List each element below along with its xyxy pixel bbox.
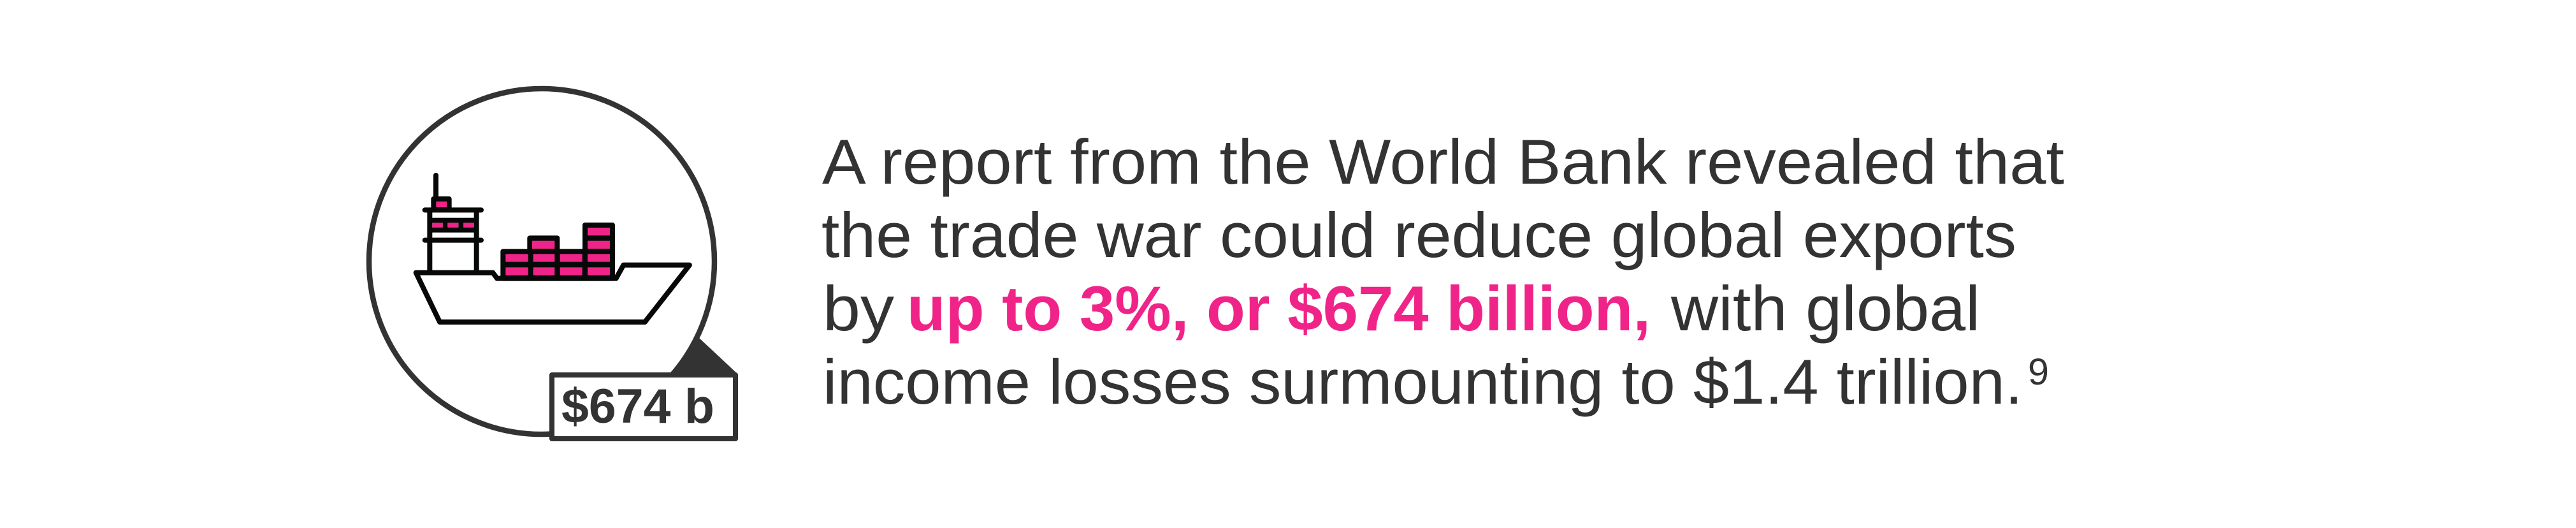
footnote marker: 9 bbox=[2028, 351, 2049, 393]
line 3: by bbox=[823, 273, 895, 344]
icon: cargo ship bbox=[416, 175, 690, 322]
body text bbox=[821, 126, 2064, 417]
ship hull bbox=[416, 265, 690, 322]
cargo containers bbox=[503, 225, 612, 279]
line 2: the trade war could reduce global exports bbox=[821, 200, 2016, 270]
bubble outline bbox=[369, 89, 714, 434]
callout bubble with ship icon and value bbox=[369, 89, 738, 439]
line 3 bbox=[823, 273, 1980, 344]
line 4: income losses surmounting to $1.4 trillion. bbox=[823, 346, 2023, 417]
highlighted figure: up to 3%, or $674 billion, bbox=[907, 273, 1651, 344]
ship bridge tower bbox=[425, 175, 481, 272]
line 1: A report from the World Bank revealed that bbox=[822, 126, 2064, 197]
bubble pointer bbox=[669, 338, 738, 374]
value box bbox=[552, 375, 735, 439]
value box: $674 b bbox=[561, 379, 714, 434]
line 3: with global bbox=[1670, 273, 1980, 344]
